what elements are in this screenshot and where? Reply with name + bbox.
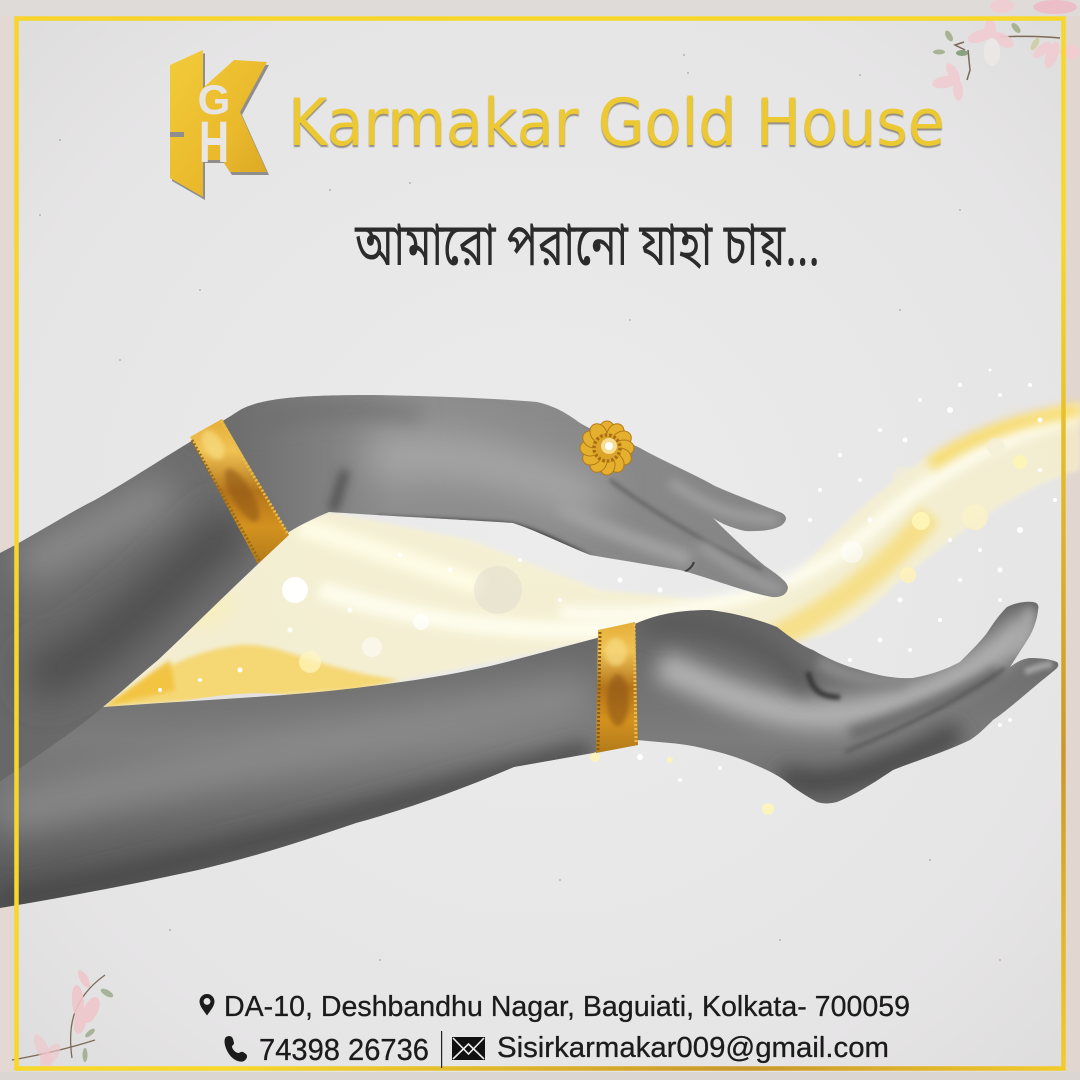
address line — [200, 991, 910, 1023]
brand name: Karmakar Gold House — [288, 86, 945, 161]
tagline: আমারো পরানো যাহা চায়... — [354, 211, 820, 290]
phone number: 74398 26736 — [259, 1032, 429, 1067]
paper specks — [39, 54, 1001, 961]
lower arm and open hand — [0, 602, 1058, 908]
lower bangle — [596, 622, 638, 753]
address text: DA-10, Deshbandhu Nagar, Baguiati, Kolkata- 700059 — [224, 991, 910, 1023]
icon: location pin — [200, 994, 214, 1016]
upper bangle — [190, 419, 289, 564]
sparkle dots — [158, 368, 1057, 815]
floral corner top right — [931, 0, 1080, 101]
upper arm and hand — [0, 395, 788, 782]
gold flower ring — [580, 421, 634, 475]
logo letter G: G — [198, 76, 230, 123]
logo letter H: H — [199, 110, 229, 175]
contact line — [225, 1031, 889, 1068]
gold ribbon swoosh — [103, 402, 1080, 707]
divider — [441, 1031, 442, 1068]
icon: phone — [225, 1036, 247, 1062]
floral corner bottom left — [12, 968, 115, 1071]
logo mark — [170, 50, 269, 200]
email: Sisirkarmakar009@gmail.com — [497, 1032, 889, 1064]
icon: envelope — [452, 1037, 485, 1060]
